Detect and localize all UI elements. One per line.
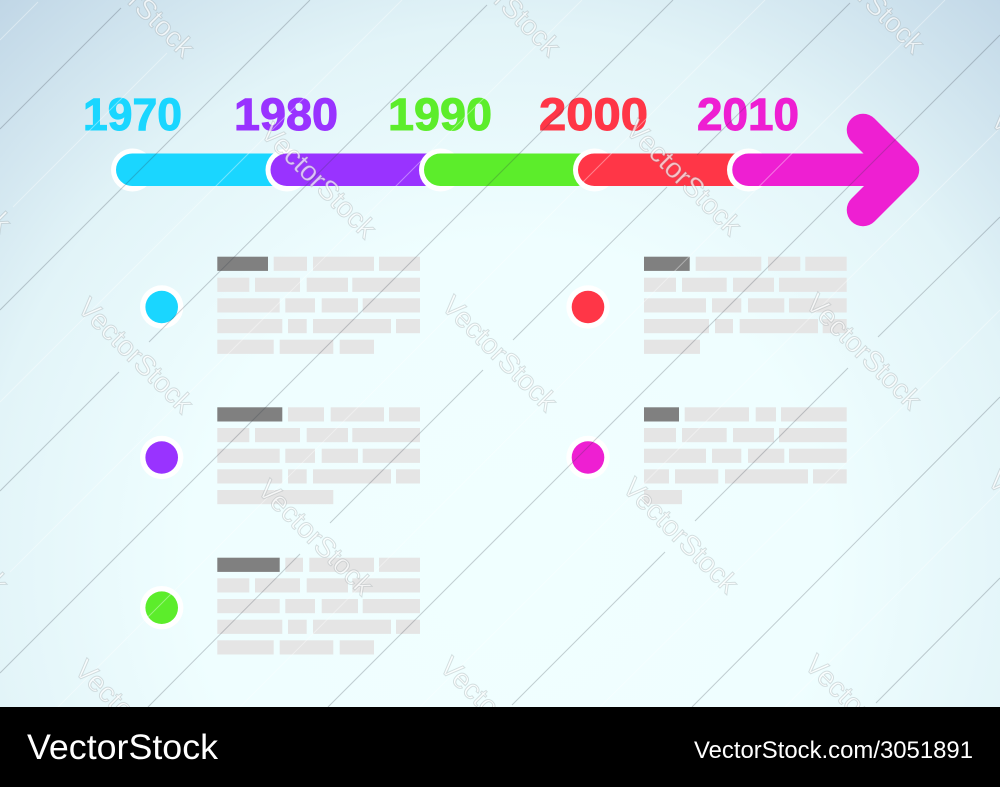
segment 1970 (111, 148, 306, 192)
footer image id: VectorStock.com/3051891 (694, 737, 973, 764)
watermark pattern: VectorStock (255, 117, 383, 245)
segment 2000 (573, 148, 768, 192)
text placeholder block 4 (644, 257, 847, 354)
marker dot green (140, 586, 183, 629)
marker dot magenta (566, 436, 610, 479)
footer bar (0, 707, 1000, 787)
year 1970: 1970 (83, 89, 182, 140)
footer brand: VectorStock (27, 727, 218, 767)
text placeholder block 1 (217, 257, 420, 354)
text placeholder block 2 (217, 407, 420, 504)
watermark pattern: VectorStock (72, 292, 200, 420)
watermark pattern: VectorStock (252, 474, 380, 602)
timeline arrow (111, 130, 903, 210)
year 1980: 1980 (234, 89, 338, 140)
year 1990: 1990 (388, 89, 492, 140)
watermark pattern: VectorStock (620, 114, 748, 242)
text placeholder block 5 (644, 407, 847, 504)
watermark pattern: VectorStock (434, 651, 562, 779)
text placeholder block 3 (217, 558, 420, 654)
watermark pattern: VectorStock (436, 290, 564, 418)
marker dot cyan (140, 285, 183, 329)
segment 2010 with arrow head (727, 130, 903, 210)
watermark pattern: VectorStock (617, 472, 745, 600)
year 2010: 2010 (697, 89, 799, 140)
segment 1990 (419, 148, 614, 192)
marker dot red (566, 285, 610, 329)
watermark pattern: VectorStock (799, 649, 927, 777)
marker dot purple (140, 436, 183, 479)
year 2000: 2000 (539, 89, 648, 140)
watermark pattern: VectorStock (800, 288, 928, 416)
watermark pattern: VectorStock (69, 654, 197, 782)
year labels (83, 89, 799, 140)
segment 1980 (266, 148, 460, 192)
